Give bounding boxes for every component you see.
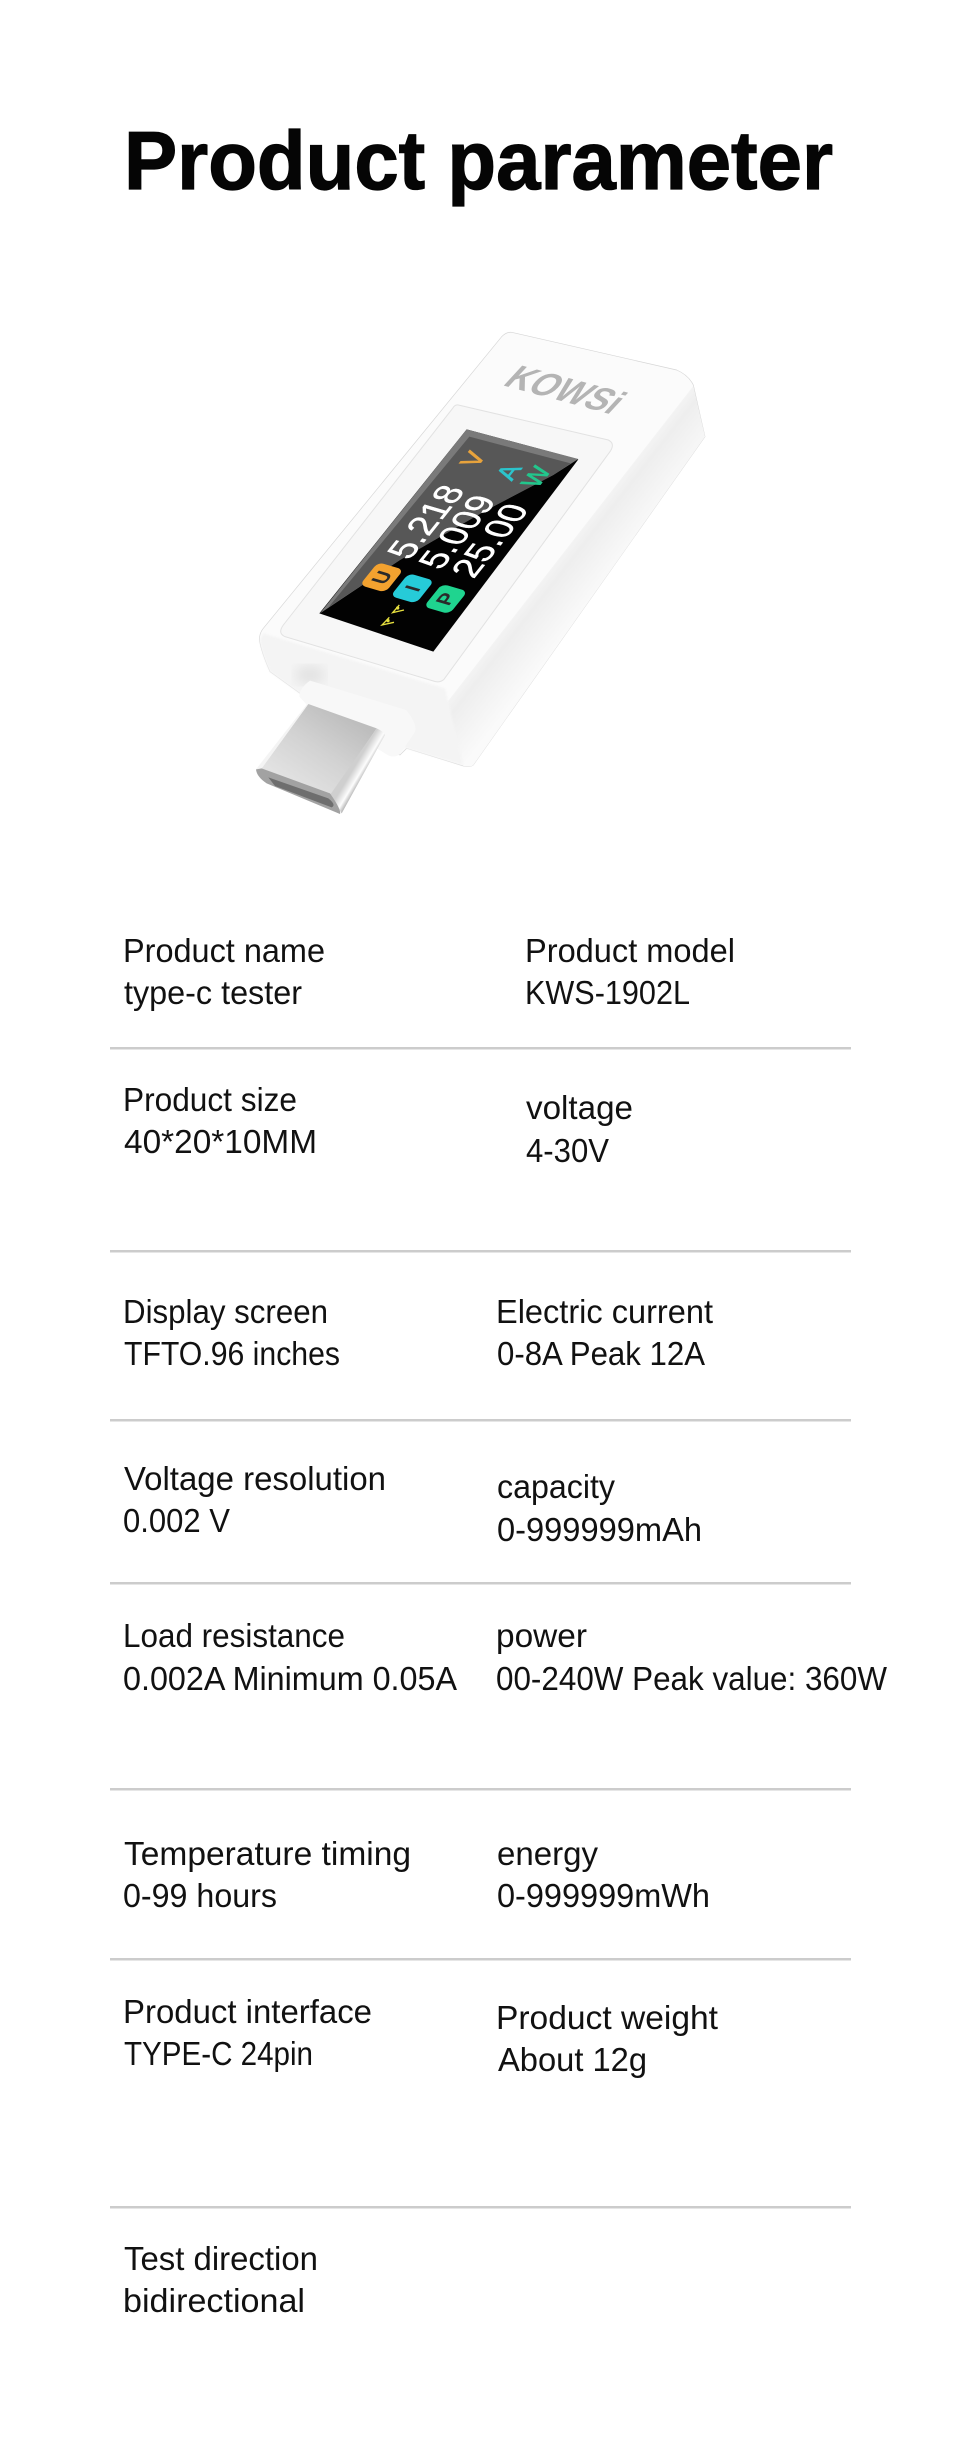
- cell: power: [496, 1617, 888, 1697]
- badge I: I: [400, 583, 426, 594]
- screen reflection: [328, 437, 571, 607]
- badge U: [360, 562, 404, 593]
- cell: voltage resolution: [123, 1460, 386, 1539]
- cell: temperature timing: Temperature timing: [124, 1835, 411, 1872]
- reading: power: 25.00: [442, 499, 538, 582]
- cell: product interface: TYPE-C 24pin: [124, 2035, 313, 2072]
- cell: product model: Product model: [525, 932, 735, 969]
- screen black base: [319, 429, 578, 652]
- cell: electric current: 0-8A Peak 12A: [497, 1335, 705, 1372]
- reading: voltage: 5.218: [378, 481, 474, 563]
- spec row 8: test direction: bidirectional: [123, 2282, 305, 2319]
- spec row 2: [123, 1081, 633, 1169]
- device body: [259, 332, 705, 767]
- direction arrows: [382, 605, 404, 625]
- cell: temperature timing: 0-99 hours: [123, 1877, 277, 1914]
- cell: capacity: [497, 1468, 702, 1548]
- cell: voltage: [526, 1089, 633, 1169]
- screen reflection bevel: [320, 429, 578, 613]
- cell: energy: 0-999999mWh: [497, 1877, 710, 1914]
- spec row 7: [123, 1993, 718, 2078]
- plug shell: [262, 704, 377, 795]
- cell: display screen: Display screen: [123, 1293, 328, 1330]
- reading: current: 5.009: [409, 491, 505, 573]
- cell: product name: Product name: [123, 932, 325, 969]
- badge U: U: [367, 569, 398, 587]
- unit W: W: [514, 463, 558, 491]
- logo: KOWSi: KOWSi: [496, 359, 635, 421]
- plug end face: [256, 768, 340, 814]
- cell: product size: [123, 1081, 317, 1160]
- device end facet: [260, 633, 463, 765]
- cell: voltage: voltage: [526, 1089, 633, 1126]
- cell: product model: KWS-1902L: [525, 974, 690, 1011]
- cell: electric current: [496, 1293, 713, 1372]
- cell: voltage resolution: 0.002 V: [123, 1502, 230, 1539]
- spec row 3: [123, 1293, 713, 1372]
- title: Product parameter: [124, 114, 833, 207]
- plug opening: [268, 777, 334, 807]
- spec row 8: test direction: [123, 2240, 318, 2319]
- cell: product interface: Product interface: [123, 1993, 372, 2030]
- badge P: [424, 584, 468, 614]
- cell: capacity: 0-999999mAh: [497, 1511, 702, 1548]
- spec row 5: [123, 1617, 888, 1697]
- badge I: [390, 573, 434, 604]
- cell: load resistance: 0.002A Minimum 0.05A: [123, 1660, 457, 1697]
- cell: product size: 40*20*10MM: [124, 1123, 317, 1160]
- collar shadow: [295, 666, 325, 684]
- product image: USB-C tester: [256, 332, 705, 814]
- spec row 1: [123, 932, 735, 1011]
- USB-C plug: [256, 704, 385, 814]
- spec row 6: [123, 1835, 710, 1914]
- cell: product interface: [123, 1993, 372, 2072]
- cell: electric current: Electric current: [496, 1293, 713, 1330]
- cell: product name: [123, 932, 325, 1011]
- plug left highlight: [256, 704, 308, 769]
- cell: display screen: TFTO.96 inches: [124, 1335, 340, 1372]
- cell: display screen: [123, 1293, 340, 1372]
- screen: [319, 429, 578, 652]
- screen bezel panel: [281, 405, 612, 682]
- device side facet: [445, 386, 705, 767]
- spec row 8: test direction: Test direction: [124, 2240, 318, 2277]
- cell: voltage resolution: Voltage resolution: [124, 1460, 386, 1497]
- plug side band: [330, 728, 385, 813]
- cell: energy: [497, 1835, 710, 1914]
- cell: product size: Product size: [123, 1081, 297, 1118]
- cell: power: power: [496, 1617, 587, 1654]
- cell: temperature timing: [123, 1835, 411, 1914]
- cell: voltage: 4-30V: [526, 1132, 609, 1169]
- cell: product weight: [496, 1999, 718, 2078]
- cell: load resistance: [123, 1617, 457, 1697]
- cell: power: 00-240W Peak value: 360W: [496, 1660, 888, 1697]
- cell: product model: [525, 932, 735, 1011]
- badge P: P: [431, 590, 462, 608]
- cell: product weight: Product weight: [496, 1999, 718, 2036]
- cell: load resistance: Load resistance: [123, 1617, 345, 1654]
- connector collar: [299, 681, 415, 757]
- cell: product name: type-c tester: [124, 974, 302, 1011]
- unit A: A: [489, 461, 529, 483]
- cell: product weight: About 12g: [498, 2041, 647, 2078]
- unit V: V: [453, 448, 493, 470]
- cell: capacity: capacity: [497, 1468, 615, 1505]
- cell: energy: energy: [497, 1835, 598, 1872]
- spec row 4: [123, 1460, 702, 1548]
